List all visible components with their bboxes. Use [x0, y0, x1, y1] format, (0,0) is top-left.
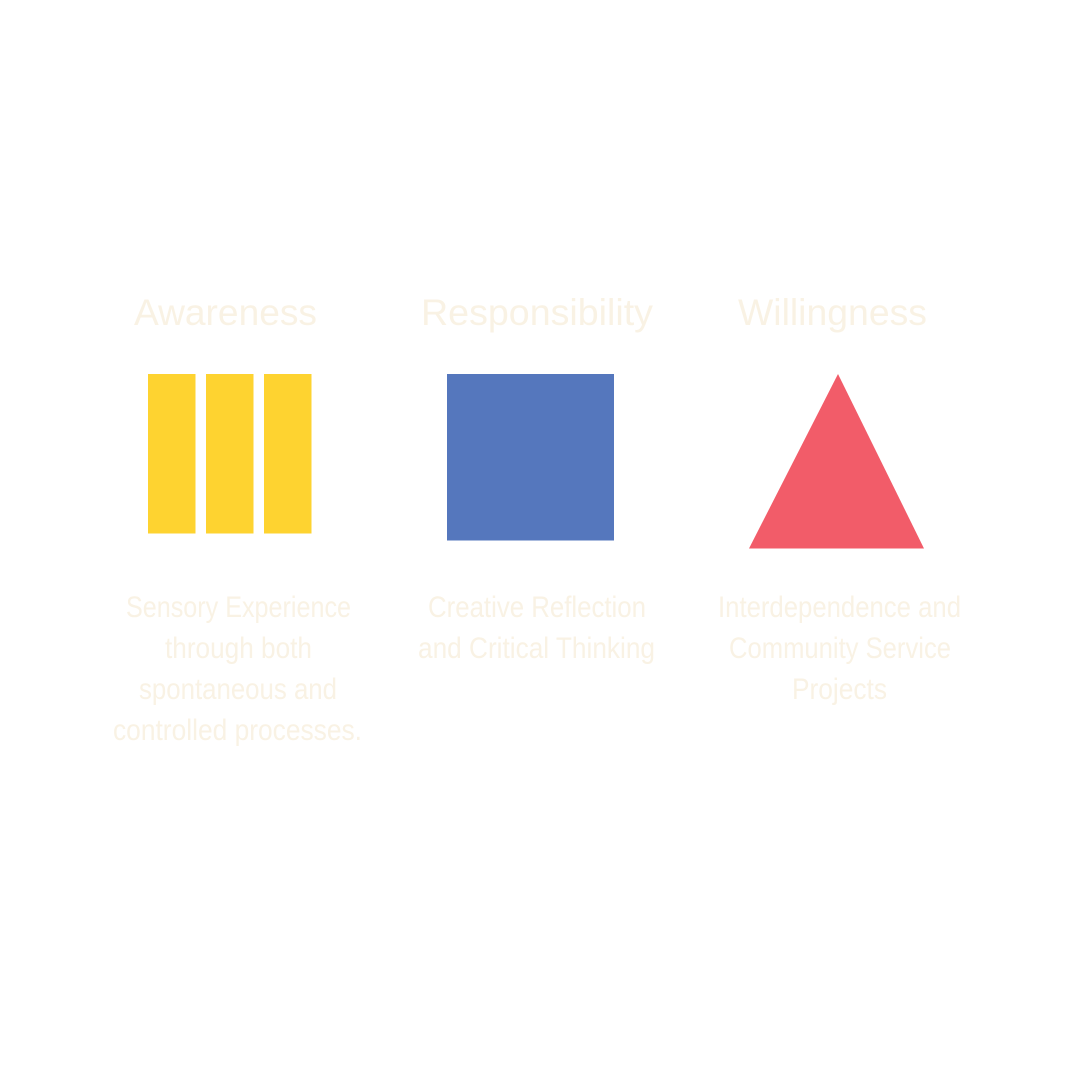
text block: Awareness description: [113, 591, 362, 747]
text block: Responsibility description: Creative Reflection: [428, 591, 646, 624]
text block: Willingness description: [718, 591, 961, 706]
text block: Awareness description: spontaneous and: [139, 673, 337, 706]
icon: red triangle: [749, 374, 924, 548]
text block: Willingness description: Community Service: [729, 632, 951, 665]
text block: Willingness description: Interdependence and: [718, 591, 961, 624]
column: Awareness: [113, 292, 362, 747]
heading: Awareness: Awareness: [134, 292, 317, 333]
column: Willingness: [718, 292, 961, 706]
text block: Responsibility description: [418, 591, 655, 665]
text block: Awareness description: controlled processes.: [113, 714, 362, 747]
icon: three yellow bars: [148, 374, 312, 534]
heading: Willingness: Willingness: [738, 292, 927, 333]
text block: Responsibility description: and Critical Thinking: [418, 632, 655, 665]
column: Responsibility: [418, 292, 655, 665]
text block: Awareness description: through both: [165, 632, 312, 665]
text block: Willingness description: Projects: [792, 673, 887, 706]
text block: Awareness description: Sensory Experience: [126, 591, 351, 624]
icon: blue square: [447, 374, 614, 540]
heading: Responsibility: Responsibility: [421, 292, 653, 333]
